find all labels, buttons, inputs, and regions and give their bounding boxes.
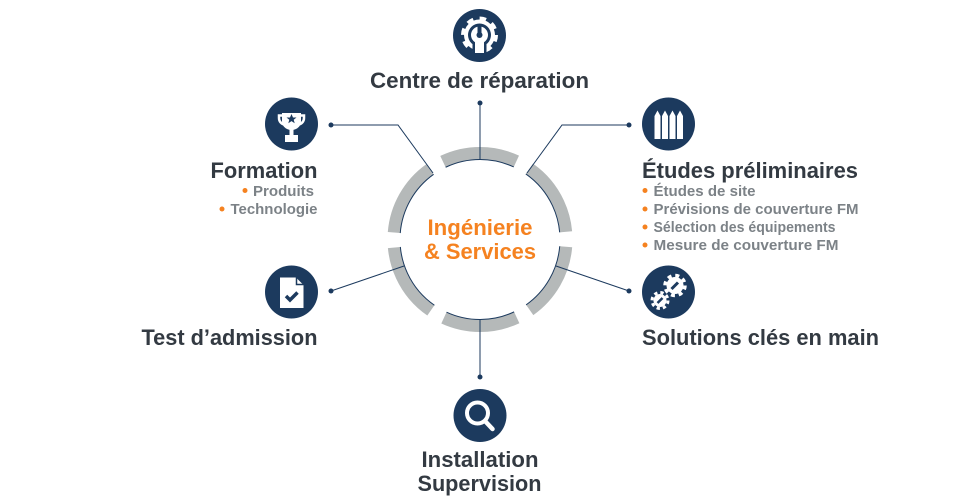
- central title: & Services: [424, 239, 536, 264]
- text block: Formation: Technologie: [230, 202, 318, 218]
- heading: Installation Supervision: Installation: [422, 447, 538, 472]
- text block: Études préliminaires: Sélection des équipements: [654, 220, 836, 236]
- connector: bottom: [478, 319, 482, 380]
- central title: Ingénierie: [428, 215, 532, 240]
- icon: document with check: [265, 266, 318, 318]
- icon: magnifier: [454, 389, 506, 442]
- heading: Installation Supervision: [418, 447, 542, 496]
- icon: pencils: [642, 98, 695, 150]
- connector: top: [478, 100, 482, 159]
- text block: Études préliminaires: [642, 158, 858, 254]
- icon: gears: [642, 266, 695, 318]
- text block: Formation: Formation: [210, 158, 318, 183]
- heading: Installation Supervision: Supervision: [418, 471, 542, 496]
- icon: trophy: [265, 98, 318, 150]
- central title: [424, 215, 536, 264]
- heading: Centre de réparation: Centre de réparation: [370, 68, 589, 93]
- icon: gear and wrench: [453, 9, 506, 62]
- text block: Formation: Produits: [253, 184, 314, 200]
- text block: Études préliminaires: Études de site: [654, 183, 756, 200]
- heading: Test d'admission: Test d’admission: [142, 325, 318, 350]
- central ring: [365, 125, 595, 354]
- text block: Études préliminaires: Mesure de couverture FM: [654, 238, 838, 254]
- text block: Études préliminaires: Prévisions de couverture FM: [654, 202, 858, 218]
- text block: Études préliminaires: Études préliminaires: [642, 158, 858, 183]
- heading: Solutions clés en main: Solutions clés en main: [642, 325, 879, 350]
- connector: lower left: [328, 266, 404, 294]
- connector: upper right: [527, 122, 632, 173]
- text block: Formation: [210, 158, 318, 218]
- connector: lower right: [556, 266, 632, 294]
- connector: upper left: [328, 122, 433, 173]
